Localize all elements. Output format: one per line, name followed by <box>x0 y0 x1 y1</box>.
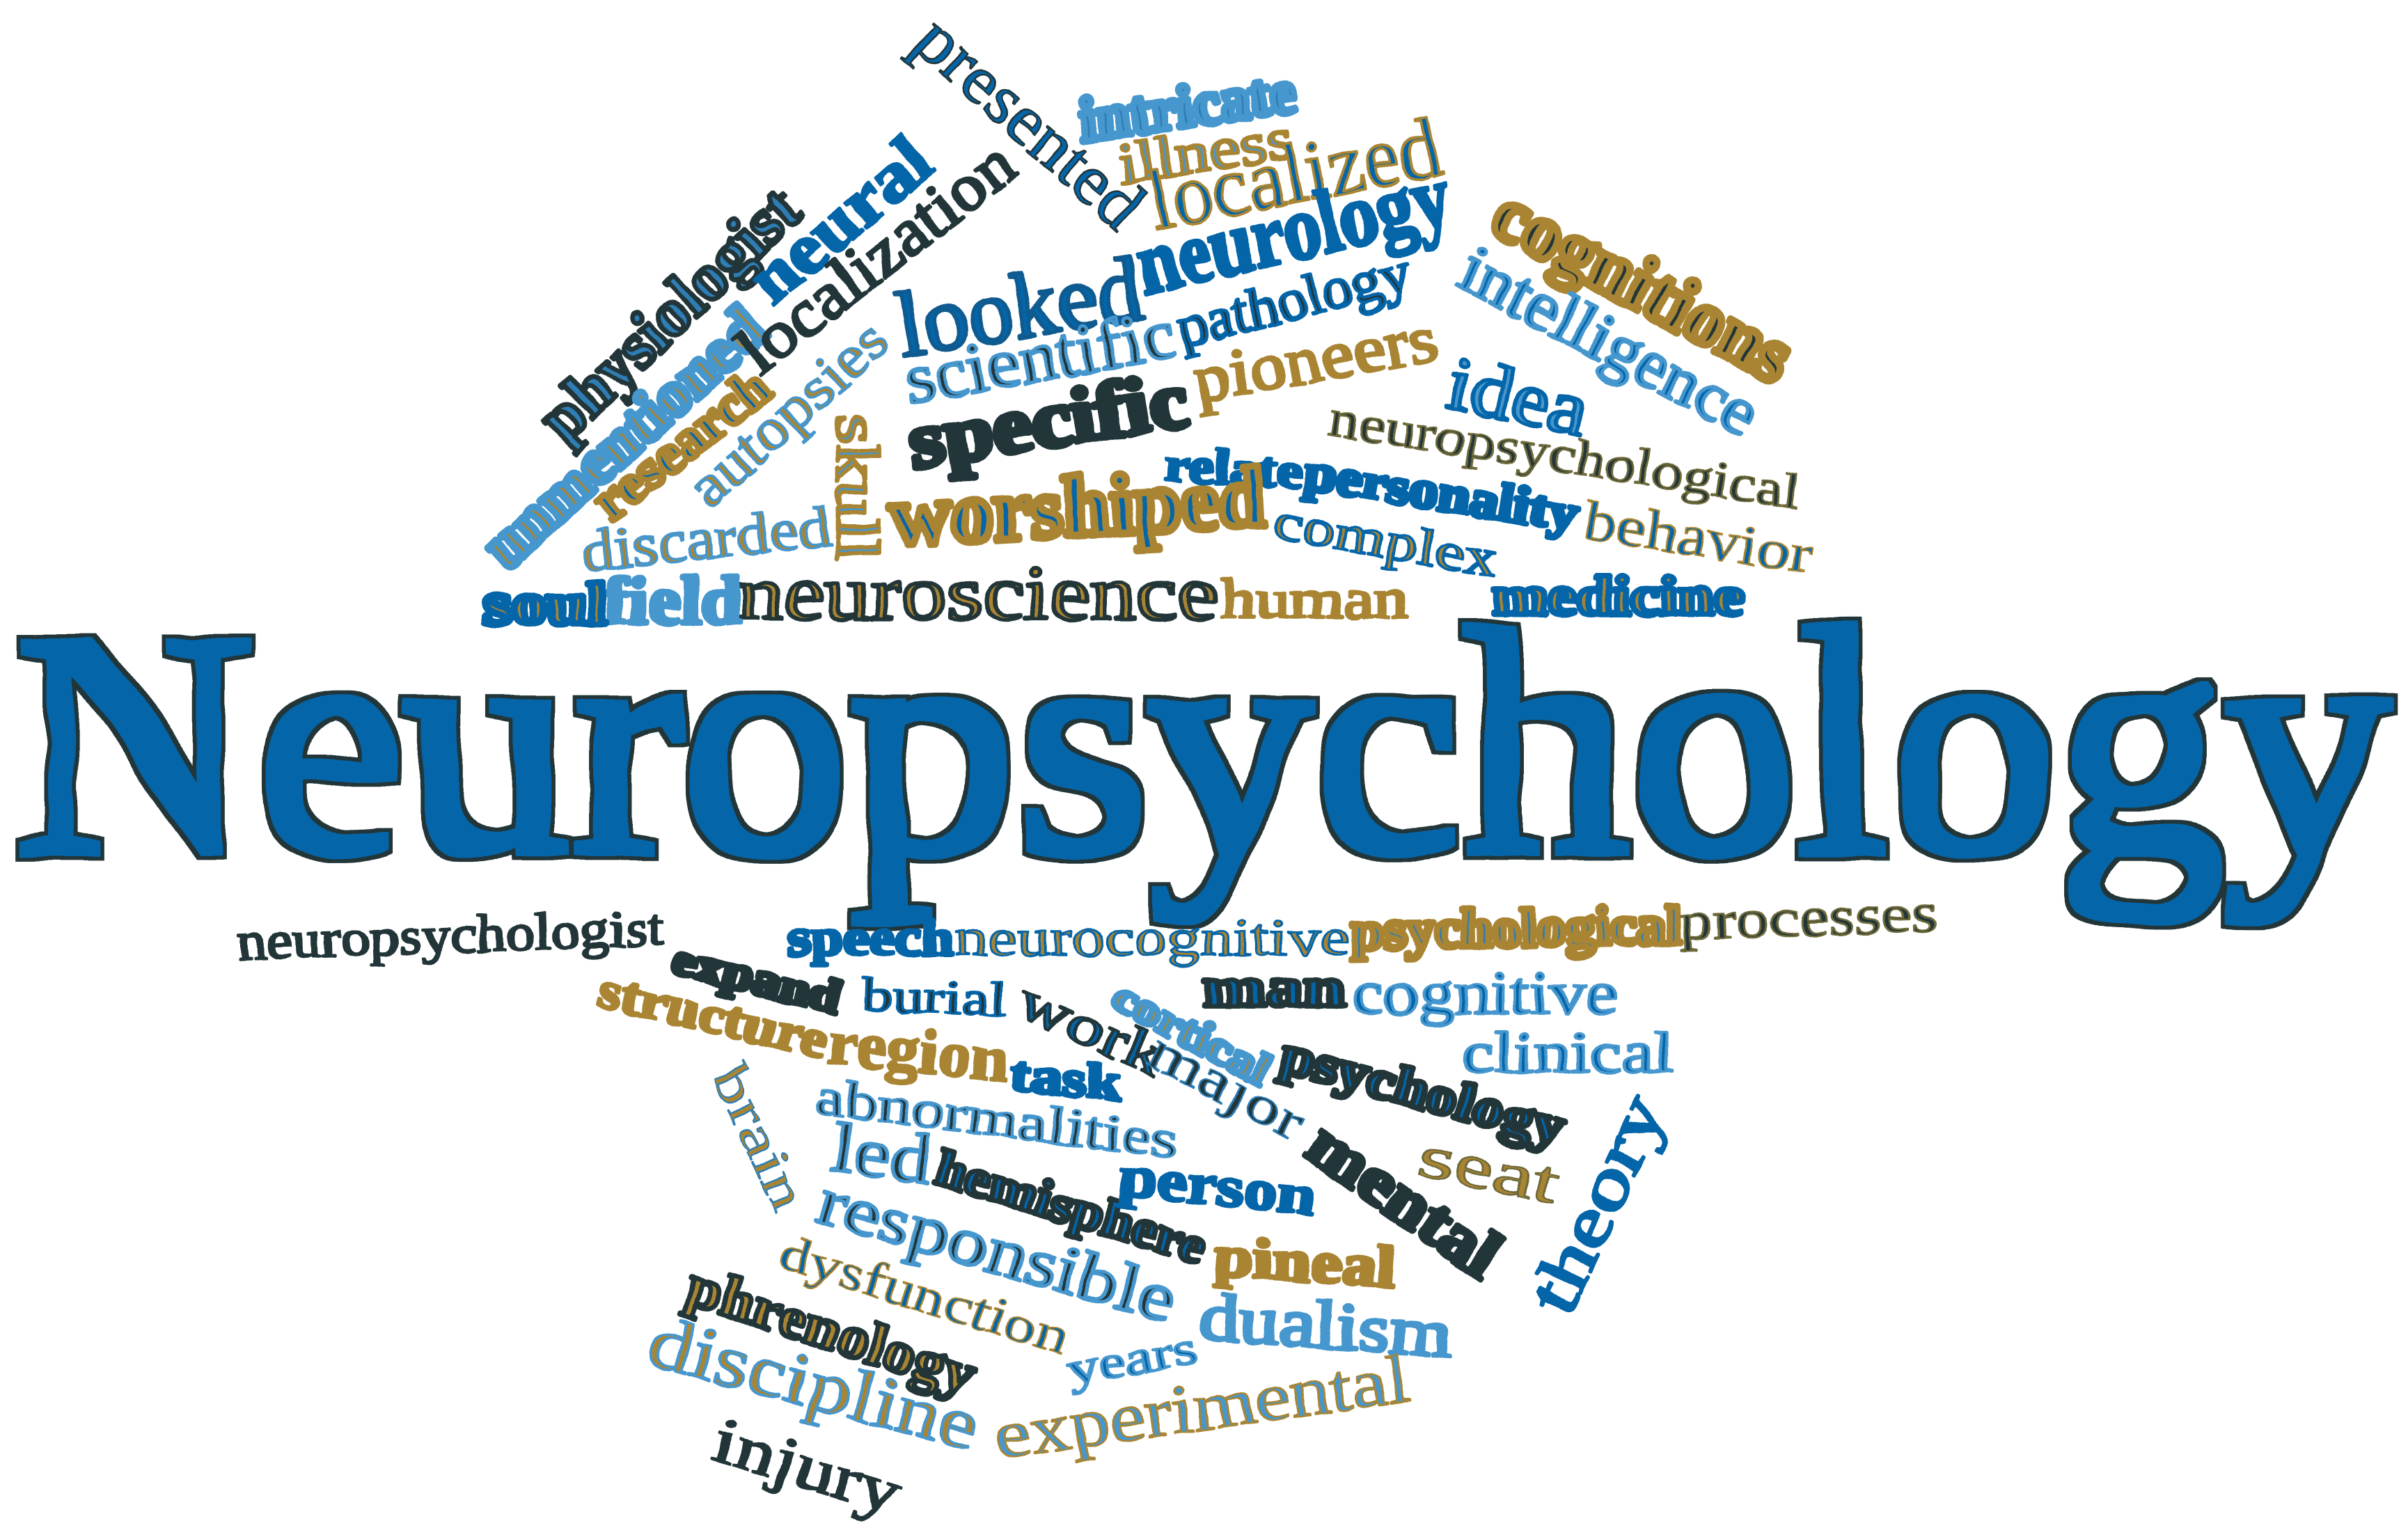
upper word cluster <box>469 0 1817 638</box>
word: cognitive: cognitive <box>1351 959 1617 1027</box>
word: burial: burial <box>861 968 1007 1026</box>
word: discarded: discarded <box>579 494 834 585</box>
word: unmentioned: unmentioned <box>469 292 779 582</box>
word: presented: presented <box>900 0 1160 244</box>
word: phrenology: phrenology <box>679 1253 984 1408</box>
title: Neuropsychology: Neuropsychology <box>14 562 2391 924</box>
word: localized: localized <box>1140 99 1448 249</box>
word: cognitions: cognitions <box>1479 170 1807 399</box>
word: skull: skull <box>823 415 891 560</box>
word: cortical: cortical <box>1104 970 1280 1096</box>
word: field: field <box>604 564 741 638</box>
word: injury: injury <box>705 1404 910 1529</box>
word: task: task <box>1008 1046 1124 1111</box>
word: major: major <box>1138 1020 1316 1153</box>
word: experimental: experimental <box>990 1341 1414 1474</box>
word: autopsies: autopsies <box>675 307 901 520</box>
word: pathology: pathology <box>1170 239 1417 360</box>
word: relate: relate <box>1163 438 1305 499</box>
word: neuroscience: neuroscience <box>737 551 1218 636</box>
word: theory: theory <box>1513 1082 1681 1324</box>
word: intelligence: intelligence <box>1447 231 1771 450</box>
word: medicine: medicine <box>1493 565 1743 626</box>
word: research: research <box>581 356 782 532</box>
word: scientific: scientific <box>898 294 1181 419</box>
word: personality: personality <box>1300 443 1582 543</box>
word: years: years <box>1064 1323 1201 1396</box>
word: pioneers: pioneers <box>1188 301 1442 417</box>
word: speech: speech <box>788 909 954 967</box>
word: hemisphere: hemisphere <box>929 1139 1213 1275</box>
word: neurocognitive: neurocognitive <box>955 909 1350 967</box>
word: complex: complex <box>1270 492 1502 588</box>
word: neuropsychological: neuropsychological <box>1325 390 1804 520</box>
word: worshiped: worshiped <box>887 449 1268 564</box>
word: mental: mental <box>1294 1105 1516 1292</box>
word: structure: structure <box>593 961 833 1070</box>
word: behavior: behavior <box>1580 489 1817 586</box>
word: seat: seat <box>1413 1121 1566 1217</box>
word: illness: illness <box>1113 106 1298 197</box>
word: looked: looked <box>890 237 1149 376</box>
word: intricate: intricate <box>1075 57 1300 155</box>
word: brain: brain <box>700 1055 817 1219</box>
word: soul: soul <box>484 572 606 637</box>
word: neural: neural <box>732 121 947 319</box>
word: responsible: responsible <box>810 1163 1185 1337</box>
word: expand: expand <box>667 933 847 1024</box>
word: physiologist: physiologist <box>524 172 814 456</box>
word: localization: localization <box>723 126 1030 388</box>
word: idea: idea <box>1440 340 1596 452</box>
word: neurology: neurology <box>1126 145 1460 314</box>
word: processes: processes <box>1678 883 1938 952</box>
word: work: work <box>1009 969 1174 1087</box>
word: psychological: psychological <box>1351 894 1682 961</box>
word: discipline: discipline <box>641 1300 989 1467</box>
word: clinical: clinical <box>1462 1020 1674 1085</box>
word: abnormalities: abnormalities <box>812 1068 1181 1169</box>
word: human: human <box>1221 569 1408 630</box>
word: psychology: psychology <box>1275 1024 1572 1157</box>
word: specific: specific <box>903 354 1194 486</box>
word: neuropsychologist: neuropsychologist <box>237 899 666 972</box>
lower word cluster <box>237 883 1938 1529</box>
word: region: region <box>825 1006 1012 1096</box>
word: dualism: dualism <box>1197 1279 1455 1371</box>
word: pineal: pineal <box>1212 1223 1398 1300</box>
word: person: person <box>1117 1144 1319 1229</box>
word: man: man <box>1202 957 1345 1018</box>
word: led: led <box>827 1108 937 1199</box>
word: dysfunction: dysfunction <box>772 1224 1075 1365</box>
